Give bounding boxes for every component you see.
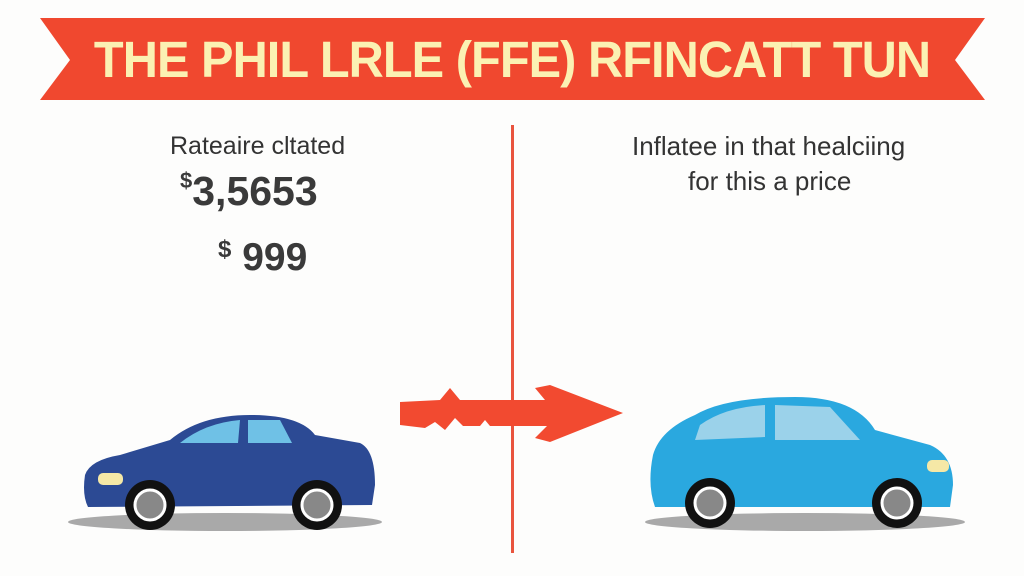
left text block xyxy=(170,132,345,279)
arrow xyxy=(400,385,623,442)
title banner xyxy=(40,18,985,100)
car: blue sedan xyxy=(68,415,382,531)
right text block: Inflatee in that healciing xyxy=(632,131,905,161)
left text block: Rateaire cltated xyxy=(170,132,345,160)
divider line xyxy=(511,125,514,553)
car: light blue hatchback xyxy=(645,397,965,531)
right text block xyxy=(632,131,905,196)
left text block: $ 999 xyxy=(218,236,307,279)
left text block: $3,5653 xyxy=(180,168,318,214)
right text block: for this a price xyxy=(688,166,851,196)
title text: THE PHIL LRLE (FFE) RFINCATT TUN xyxy=(94,31,930,88)
